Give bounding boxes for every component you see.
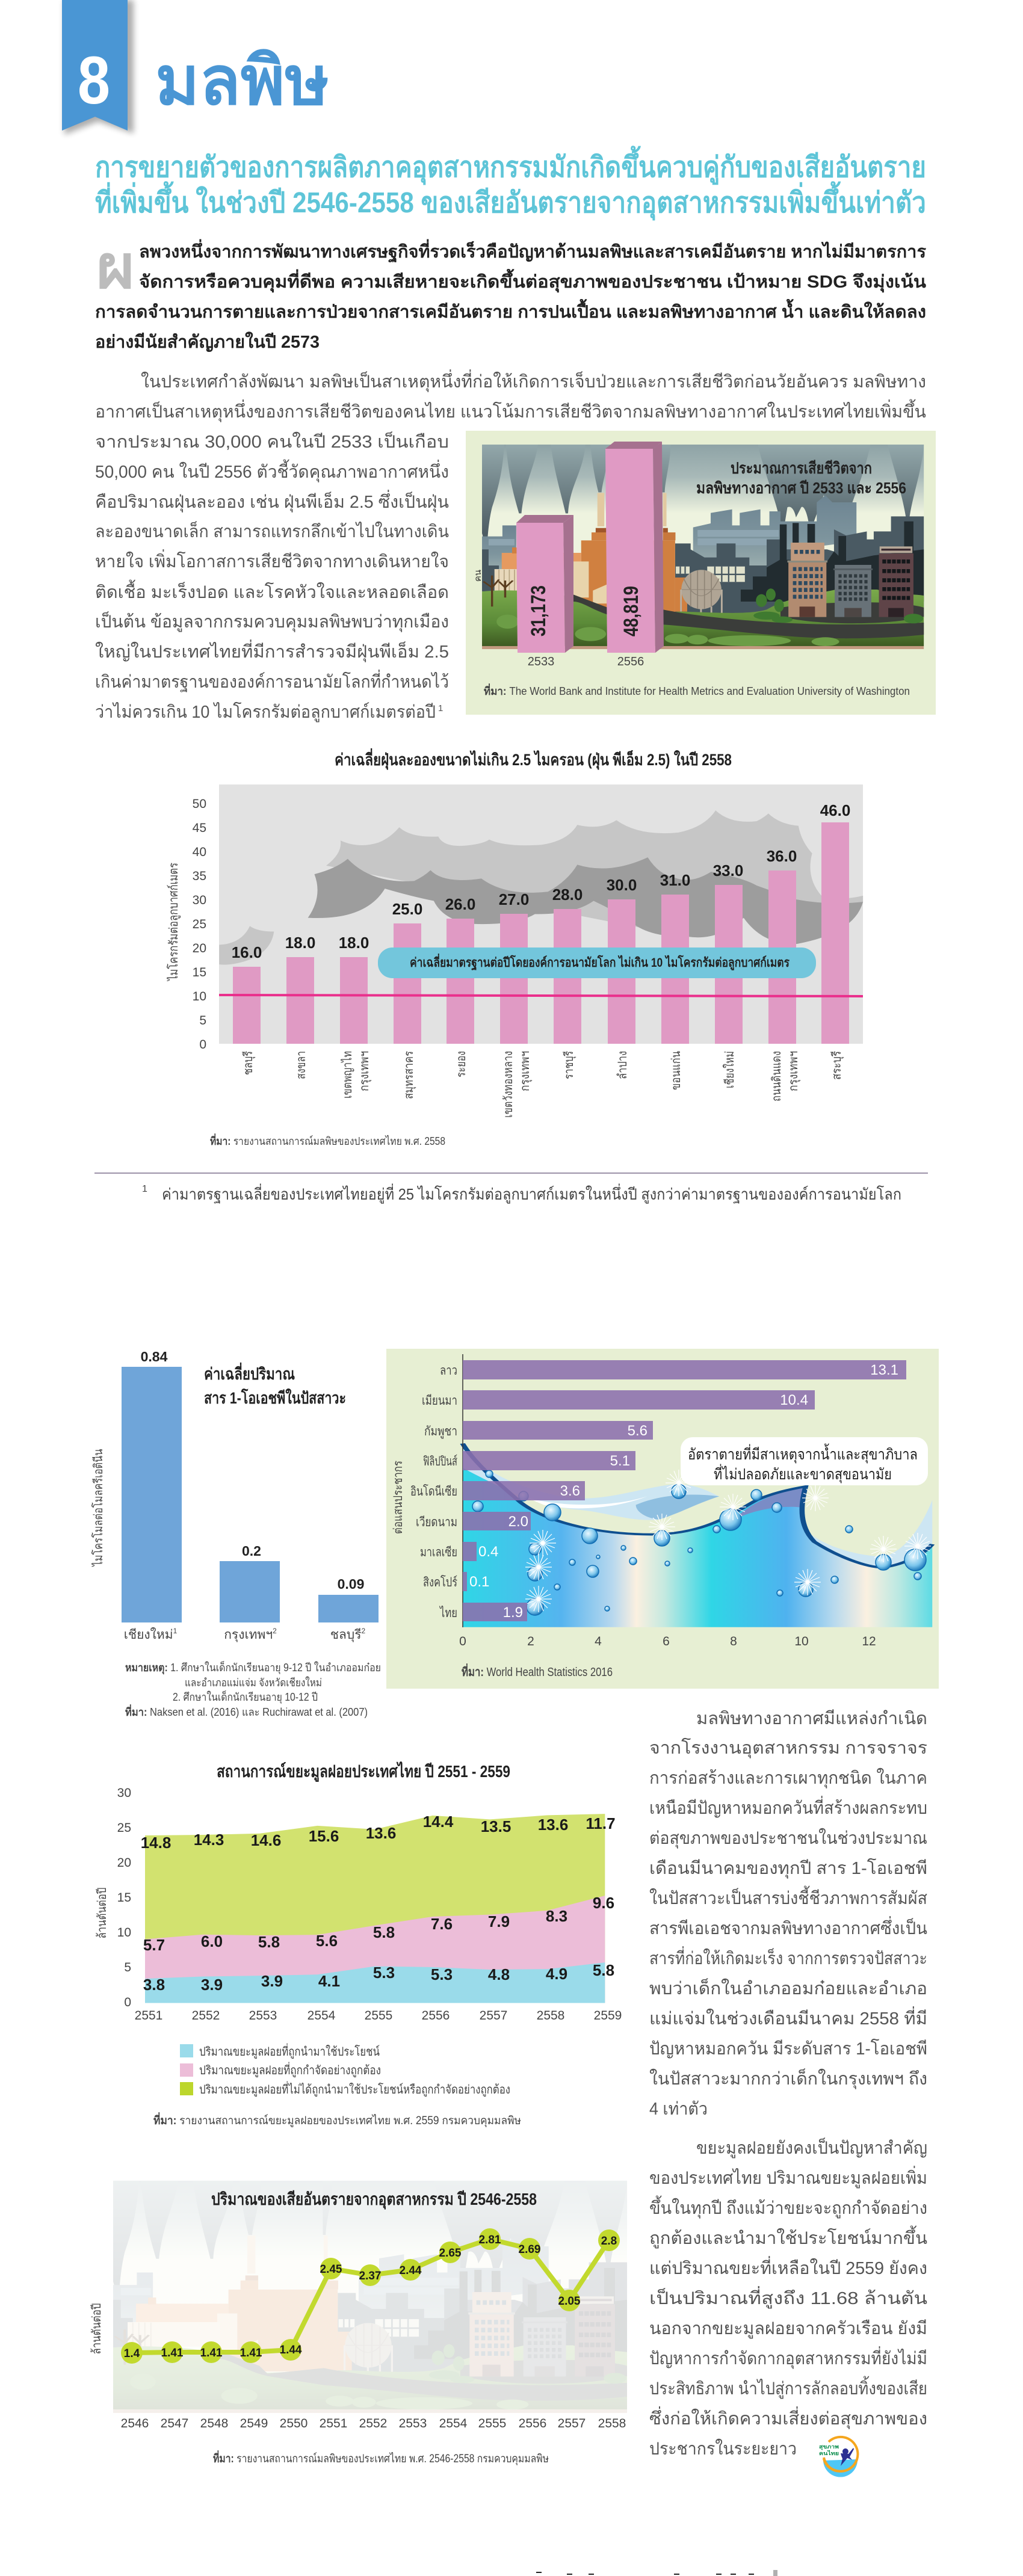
source: ที่มา: รายงานสถานการณ์มลพิษของประเทศไทย พ.ศ. 2546-2558 กรมควบคุมมลพิษ [213, 2450, 549, 2466]
values middle series: 6.0 [201, 1932, 223, 1950]
point values: 1.41 [240, 2347, 262, 2359]
x axis years: 2556 [519, 2417, 546, 2430]
clouds [219, 810, 863, 965]
body text: waste: ซึ่งก่อให้เกิดความเสี่ยงต่อสุขภาพของ [649, 2406, 927, 2429]
illustration: industrial city [482, 445, 924, 649]
y axis values: 5 [124, 1961, 131, 1974]
country labels: อินโดนีเซีย [410, 1484, 457, 1499]
body text: waste: เป็นปริมาณที่สูงถึง 11.68 ล้านตัน [649, 2286, 927, 2309]
country labels: ฟิลิปปินส์ [423, 1454, 457, 1468]
x axis years: 2555 [478, 2417, 506, 2430]
bar values: 36.0 [767, 847, 797, 865]
x axis labels: ชลบุรี [242, 1051, 256, 1075]
body text: air pollution sources: ปัญหาหมอกควัน มีระดับสาร 1-โอเอชพี [649, 2038, 927, 2059]
chapter ribbon with number: 8 [78, 43, 110, 118]
x axis labels [242, 1051, 844, 1118]
body text: air pollution deaths: 50,000 คน ในปี 2556 ตัวชี้วัดคุณภาพอากาศหนึ่ง [95, 459, 449, 482]
body text: air pollution deaths: ว่าไม่ควรเกิน 10 ไมโครกรัมต่อลูกบาศก์เมตรต่อปี [95, 701, 436, 723]
x axis years: 2551 [320, 2417, 347, 2430]
x axis labels: สมุทรสาคร [403, 1051, 416, 1099]
body text: air pollution sources: แม่แจ่มในช่วงเดือนมีนาคม 2558 ที่มี [649, 2006, 927, 2029]
icon: Thai Health logo: สุขภาพ [819, 2444, 839, 2450]
y axis values: 25 [117, 1821, 131, 1835]
values middle series: 9.6 [593, 1894, 614, 1912]
bar 2556: 2556 [617, 655, 644, 668]
bar values: 30.0 [607, 876, 637, 894]
point values: 2.81 [479, 2234, 501, 2246]
country labels: เมียนมา [422, 1394, 457, 1408]
bar values: 46.0 [820, 801, 850, 819]
bar values: 18.0 [339, 934, 369, 952]
country labels: สิงคโปร์ [423, 1575, 457, 1589]
values middle series: 7.6 [431, 1915, 453, 1933]
point values: 1.41 [200, 2347, 223, 2359]
icon: Thai Health logo: คนไทย [819, 2450, 839, 2456]
x axis values [459, 1635, 876, 1648]
values middle series: 5.8 [373, 1923, 395, 1941]
bars [122, 1367, 379, 1622]
y axis title: ไมโครโมลต่อโมลครีเอตินีน [91, 1449, 105, 1567]
x axis labels: ระยอง [455, 1051, 468, 1077]
values bottom series: 5.3 [373, 1964, 395, 1982]
x axis labels: กรุงเทพฯ [519, 1051, 533, 1091]
values top series: 15.6 [309, 1827, 339, 1845]
body text: air pollution sources: 4 เท่าตัว [649, 2100, 708, 2119]
chart title: ค่าเฉลี่ยปริมาณ [204, 1362, 295, 1383]
bars [233, 822, 849, 1044]
notes and source [125, 1660, 381, 1718]
x labels [124, 1627, 366, 1642]
body text: air pollution deaths: คือปริมาณฝุ่นละออง เช่น ฝุ่นพีเอ็ม 2.5 ซึ่งเป็นฝุ่น [95, 490, 449, 513]
x axis values: 4 [595, 1635, 602, 1648]
x axis values: 6 [663, 1635, 670, 1648]
bar values: 26.0 [445, 895, 475, 913]
bar values: 1.9 [503, 1604, 523, 1621]
bar 2533: 2533 [528, 655, 554, 668]
bar values: 5.6 [628, 1423, 647, 1439]
values bottom series: 4.8 [488, 1965, 510, 1983]
body text: waste: นอกจากขยะมูลฝอยจากครัวเรือน ยังมี [649, 2319, 927, 2339]
body text: air pollution sources: เหนือมีปัญหาหมอกควันที่สร้างผลกระทบ [649, 1796, 927, 1818]
country labels: เวียดนาม [416, 1515, 457, 1529]
y axis values: 0 [124, 1995, 131, 2009]
point values: 2.69 [519, 2243, 540, 2256]
bar 2556: 48,819 [620, 586, 643, 636]
chart title [696, 459, 906, 497]
x axis years: 2553 [249, 2009, 277, 2023]
x axis values: 12 [862, 1635, 876, 1648]
point values: 1.41 [161, 2347, 184, 2359]
body text: air pollution deaths [95, 369, 926, 723]
body text: waste: ของประเทศไทย ปริมาณขยะมูลฝอยเพิ่ม [649, 2166, 927, 2189]
point values: 2.45 [320, 2263, 342, 2276]
x labels: 2 [273, 1627, 277, 1635]
subtitle heading: ที่เพิ่มขึ้น ในช่วงปี 2546-2558 ของเสียอันตรายจากอุตสาหกรรมเพิ่มขึ้นเท่าตัว [95, 181, 926, 221]
bar values: 5.1 [610, 1453, 630, 1469]
callout: ที่ไม่ปลอดภัยและขาดสุขอนามัย [714, 1464, 892, 1484]
x labels: 1 [173, 1627, 178, 1635]
subtitle heading: การขยายตัวของการผลิตภาคอุตสาหกรรมมักเกิดขึ้นควบคู่กับของเสียอันตราย [95, 146, 926, 185]
body text: air pollution deaths: ใหญ่ในประเทศไทยที่มีการสำรวจมีฝุ่นพีเอ็ม 2.5 [95, 639, 449, 662]
y axis values: 35 [193, 869, 206, 883]
x axis years: 2546 [121, 2417, 149, 2430]
line chart: hazardous industrial waste [90, 2181, 627, 2466]
values [141, 1349, 364, 1592]
x axis labels: ขอนแก่น [670, 1051, 683, 1090]
intro bold paragraph with drop cap: จัดการหรือควบคุมที่ดีพอ ความเสียหายจะเกิดขึ้นต่อสุขภาพของประชาชน เป้าหมาย SDG จึงมุ่งเน้น [139, 268, 926, 292]
x labels: ชลบุรี [330, 1628, 362, 1642]
values middle series [143, 1894, 614, 1954]
x axis values: 2 [527, 1635, 534, 1648]
values middle series: 7.9 [488, 1912, 510, 1930]
x axis years: 2548 [200, 2417, 228, 2430]
footnote: ค่ามาตรฐานเฉลี่ยของประเทศไทยอยู่ที่ 25 ไมโครกรัมต่อลูกบาศก์เมตรในหนึ่งปี สูงกว่าค่ามาตรฐานขององค์การอนามัยโลก [162, 1183, 901, 1204]
values bottom series: 3.8 [143, 1976, 165, 1994]
y axis values: 20 [193, 941, 206, 955]
callout: อัตราตายที่มีสาเหตุจากน้ำและสุขาภิบาล [688, 1443, 918, 1464]
x axis labels: กรุงเทพฯ [787, 1051, 801, 1091]
x axis labels: ราชบุรี [563, 1051, 576, 1079]
chart title: ปริมาณของเสียอันตรายจากอุตสาหกรรม ปี 2546-2558 [211, 2190, 537, 2210]
chapter ribbon with number [62, 0, 134, 135]
country labels: กัมพูชา [424, 1425, 457, 1439]
y axis values: 25 [193, 917, 206, 931]
area chart: waste situation [96, 1761, 622, 2128]
x axis years: 2557 [480, 2009, 507, 2023]
x axis labels: ลำปาง [616, 1051, 629, 1079]
body text: air pollution sources [649, 1709, 927, 2119]
faded illustration background [113, 2181, 627, 2413]
chart title: สาร 1-โอเอชพีในปัสสาวะ [204, 1388, 346, 1407]
point markers [121, 2228, 620, 2364]
y axis title: ล้านตันต่อปี [90, 2303, 104, 2355]
point values: 1.44 [280, 2344, 302, 2356]
intro bold paragraph with drop cap: ลพวงหนึ่งจากการพัฒนาทางเศรษฐกิจที่รวดเร็วคือปัญหาด้านมลพิษและสารเคมีอันตราย หากไม่มีมาตรการ [139, 239, 926, 263]
water illustration [463, 1444, 932, 1627]
body text: air pollution deaths: ละอองขนาดเล็ก สามารถแทรกลึกเข้าไปในทางเดิน [95, 520, 449, 541]
stacked areas [145, 1814, 605, 2003]
values top series: 13.5 [481, 1817, 511, 1835]
x axis years: 2552 [359, 2417, 387, 2430]
bar 2556 [605, 442, 664, 668]
chart title [204, 1362, 346, 1407]
values middle series: 5.6 [316, 1932, 338, 1950]
bar chart: 1-OHP in urine [91, 1349, 381, 1718]
panel: estimated air pollution deaths [466, 431, 936, 715]
y axis values: 10 [117, 1926, 131, 1940]
chart title: มลพิษทางอากาศ ปี 2533 และ 2556 [696, 479, 906, 497]
bar values [232, 801, 850, 961]
x axis values: 8 [730, 1635, 737, 1648]
x axis labels: เชียงใหม่ [723, 1051, 737, 1088]
panel: sanitation death rates [386, 1349, 939, 1689]
body text: air pollution sources: มลพิษทางอากาศมีแหล่งกำเนิด [696, 1709, 927, 1728]
callout pill [378, 948, 816, 978]
country labels: มาเลเซีย [420, 1545, 457, 1559]
y axis values: 30 [193, 893, 206, 907]
y axis title: ล้านตันต่อปี [96, 1888, 109, 1938]
values bottom series: 5.3 [431, 1965, 453, 1983]
point values: 2.8 [601, 2235, 617, 2248]
bar values: 33.0 [713, 861, 743, 880]
body text: waste: ถูกต้องและนำมาใช้ประโยชน์มากขึ้น [649, 2225, 927, 2249]
body text: air pollution deaths: ในประเทศกำลังพัฒนา มลพิษเป็นสาเหตุหนึ่งที่ก่อให้เกิดการเจ็บป่วยและการเสียชีวิตก่อนวัยอันควร มลพิษทาง [141, 369, 926, 392]
body text: air pollution deaths: เป็นต้น ข้อมูลจากกรมควบคุมมลพิษพบว่าทุกเมือง [95, 611, 449, 632]
bar values: 2.0 [508, 1514, 528, 1530]
x axis years [121, 2417, 626, 2430]
legend: ปริมาณขยะมูลฝอยที่ไม่ได้ถูกนำมาใช้ประโยชน์หรือถูกกำจัดอย่างถูกต้อง [199, 2081, 510, 2097]
values middle series: 5.8 [258, 1933, 280, 1951]
y axis values: 45 [193, 821, 206, 835]
source: ที่มา: รายงานสถานการณ์ขยะมูลฝอยของประเทศไทย พ.ศ. 2559 กรมควบคุมมลพิษ [153, 2112, 521, 2128]
bar values: 10.4 [780, 1392, 808, 1408]
point values: 2.65 [439, 2247, 462, 2260]
body text: waste: ประชากรในระยะยาว [649, 2438, 797, 2459]
values bottom series [143, 1961, 614, 1994]
y axis values: 15 [117, 1891, 131, 1905]
x axis years: 2550 [280, 2417, 308, 2430]
values top series: 14.3 [194, 1831, 224, 1849]
x axis years: 2556 [422, 2009, 450, 2023]
y axis values: 40 [193, 845, 206, 859]
bar 2533: 31,173 [527, 585, 550, 636]
country labels: ลาว [440, 1364, 457, 1378]
body text: waste: ประสิทธิภาพ นำไปสู่การลักลอบทิ้งของเสีย [649, 2376, 927, 2399]
horizontal bars [463, 1360, 906, 1621]
y axis title: ไมโครกรัมต่อลูกบาศก์เมตร [167, 863, 181, 982]
values top series: 14.8 [141, 1834, 171, 1852]
body text: air pollution deaths: เกินค่ามาตรฐานขององค์การอนามัยโลกที่กำหนดไว้ [95, 670, 449, 692]
values bottom series: 5.8 [593, 1961, 614, 1979]
body text: air pollution sources: ต่อสุขภาพของประชาชนในช่วงประมาณ [649, 1828, 927, 1849]
notes and source: หมายเหตุ: 1. ศึกษาในเด็กนักเรียนอายุ 9-12 ปี ในอำเภออมก๋อย [125, 1660, 381, 1675]
y axis values: 10 [193, 990, 206, 1003]
body text: air pollution deaths: จากประมาณ 30,000 คนในปี 2533 เป็นเกือบ [95, 431, 449, 452]
x axis labels: ถนนดินแดง [770, 1051, 783, 1102]
x axis years: 2554 [308, 2009, 336, 2023]
x axis values: 0 [459, 1635, 466, 1648]
bar values: 18.0 [285, 934, 315, 952]
intro bold paragraph with drop cap: ผ [96, 233, 135, 301]
intro bold paragraph with drop cap: อย่างมีนัยสำคัญภายในปี 2573 [95, 331, 320, 353]
y axis values: 0 [199, 1038, 206, 1052]
body text: air pollution deaths: หายใจ เพิ่มโอกาสการเสียชีวิตจากทางเดินหายใจ [95, 549, 449, 572]
body text: air pollution deaths: 1 [438, 703, 443, 713]
chart title: ประมาณการเสียชีวิตจาก [731, 459, 872, 477]
body text: air pollution deaths: ติดเชื้อ มะเร็งปอด และโรคหัวใจและหลอดเลือด [95, 579, 449, 602]
values middle series: 8.3 [546, 1907, 567, 1925]
values middle series: 5.7 [143, 1936, 165, 1954]
y axis values: 15 [193, 966, 206, 979]
bar values [469, 1362, 898, 1621]
y axis values: 5 [199, 1014, 206, 1028]
bar values: 27.0 [499, 890, 529, 908]
values top series: 14.6 [251, 1831, 281, 1849]
subtitle heading [95, 146, 926, 221]
x axis labels: สระบุรี [830, 1051, 844, 1080]
bubbles [472, 1470, 926, 1615]
intro bold paragraph with drop cap [95, 233, 926, 353]
source: ที่มา: รายงานสถานการณ์มลพิษของประเทศไทย พ.ศ. 2558 [210, 1133, 445, 1147]
x labels: เชียงใหม่ [124, 1628, 173, 1642]
values top series [141, 1813, 616, 1852]
bar values: 25.0 [392, 900, 422, 918]
source: ที่มา: The World Bank and Institute for Health Metrics and Evaluation University of Washington [484, 683, 910, 697]
values: 0.09 [338, 1576, 364, 1592]
point values [124, 2234, 617, 2360]
values bottom series: 3.9 [261, 1972, 283, 1990]
point values: 2.37 [359, 2270, 381, 2282]
values bottom series: 4.1 [318, 1972, 340, 1990]
bar values: 3.6 [560, 1483, 580, 1499]
bar chart: PM2.5 by station [167, 784, 863, 1118]
body text: air pollution sources: เดือนมีนาคมของทุกปี สาร 1-โอเอชพี [649, 1858, 927, 1879]
bar values: 0.4 [478, 1544, 498, 1560]
x labels: กรุงเทพฯ [224, 1628, 273, 1642]
icon: Thai Health logo [819, 2437, 858, 2477]
x axis labels: เขตวังทองหลาง [502, 1051, 515, 1118]
body text: air pollution sources: สารพีเอเอชจากมลพิษทางอากาศซึ่งเป็น [649, 1916, 927, 1938]
values top series: 14.4 [423, 1813, 454, 1831]
y axis title: ต่อแสนประชากร [392, 1461, 405, 1534]
x axis years: 2547 [161, 2417, 188, 2430]
chart title: PM2.5: ค่าเฉลี่ยฝุ่นละอองขนาดไม่เกิน 2.5 ไมครอน (ฝุ่น พีเอ็ม 2.5) ในปี 2558 [335, 748, 732, 770]
values bottom series: 3.9 [201, 1976, 223, 1994]
values bottom series: 4.9 [546, 1965, 567, 1983]
body text: air pollution sources: การก่อสร้างและการเผาทุกชนิด ในภาค [649, 1767, 927, 1789]
intro bold paragraph with drop cap: การลดจำนวนการตายและการป่วยจากสารเคมีอันตราย การปนเปื้อน และมลพิษทางอากาศ น้ำ และดินให้ลดลง [95, 298, 926, 322]
x axis years: 2552 [192, 2009, 220, 2023]
bar values: 31.0 [660, 871, 690, 889]
values: 0.2 [242, 1543, 261, 1559]
x axis values: 10 [794, 1635, 809, 1648]
x axis years: 2559 [594, 2009, 622, 2023]
bar values: 13.1 [870, 1362, 898, 1378]
body text: waste [649, 2137, 927, 2459]
x axis years: 2553 [399, 2417, 427, 2430]
chapter title: มลพิษ [155, 43, 329, 119]
x axis years: 2549 [240, 2417, 268, 2430]
body text: air pollution sources: ในปัสสาวะเป็นสารบ่งชี้ชีวภาพการสัมผัส [649, 1885, 927, 1908]
body text: waste: ขึ้นในทุกปี ถึงแม้ว่าขยะจะถูกกำจัดอย่าง [649, 2195, 927, 2219]
axis label: persons: คน [473, 570, 483, 582]
x axis years: 2554 [439, 2417, 468, 2430]
body text: waste: ขยะมูลฝอยยังคงเป็นปัญหาสำคัญ [696, 2137, 927, 2158]
chart title: สถานการณ์ขยะมูลฝอยประเทศไทย ปี 2551 - 2559 [217, 1761, 510, 1782]
callout [681, 1437, 928, 1485]
line [132, 2239, 609, 2353]
x axis years: 2558 [598, 2417, 626, 2430]
bar values: 0.1 [469, 1574, 489, 1590]
legend [180, 2043, 510, 2097]
bar 2533 [516, 515, 573, 668]
point values: 1.4 [124, 2347, 140, 2360]
x axis labels: สงขลา [295, 1051, 308, 1079]
body text: air pollution sources: สารที่ก่อให้เกิดมะเร็ง จากการตรวจปัสสาวะ [649, 1946, 927, 1968]
y axis values [193, 797, 206, 1052]
x labels: 2 [362, 1627, 366, 1635]
footnote: 1 [142, 1184, 147, 1194]
bar values: 28.0 [552, 886, 583, 904]
point values: 2.44 [400, 2264, 422, 2277]
y axis values: 50 [193, 797, 206, 811]
point values: 2.05 [558, 2295, 581, 2308]
country labels [410, 1364, 457, 1620]
y axis values [117, 1786, 131, 2009]
values top series: 13.6 [538, 1816, 568, 1834]
bar values: 16.0 [232, 943, 262, 961]
notes and source: และอำเภอแม่แจ่ม จังหวัดเชียงใหม่ [185, 1676, 322, 1689]
x axis years [135, 2009, 622, 2023]
x axis years: 2558 [537, 2009, 564, 2023]
body text: air pollution sources: ในปัสสาวะมากกว่าเด็กในกรุงเทพฯ ถึง [649, 2068, 927, 2089]
legend: ปริมาณขยะมูลฝอยที่ถูกนำมาใช้ประโยชน์ [199, 2043, 380, 2059]
source: ที่มา: World Health Statistics 2016 [462, 1663, 613, 1679]
body text: air pollution sources: จากโรงงานอุตสาหกรรม การจราจร [649, 1737, 927, 1758]
values top series: 13.6 [366, 1824, 396, 1842]
body text: waste: ปัญหาการกำจัดกากอุตสาหกรรมที่ยังไม่มี [649, 2346, 927, 2369]
WHO limit line [219, 995, 863, 996]
x axis labels: เขตพญาไท [341, 1051, 354, 1098]
notes and source: 2. ศึกษาในเด็กนักเรียนอายุ 10-12 ปี [173, 1690, 318, 1704]
body text: air pollution deaths: อากาศเป็นสาเหตุหนึ่งของการเสียชีวิตของคนไทย แนวโน้มการเสียชีวิตจากมลพิษทางอากาศในประเทศไทยเพิ่มขึ้น [95, 399, 926, 422]
x axis years: 2557 [558, 2417, 586, 2430]
y axis values: 30 [117, 1786, 131, 1800]
y axis values: 20 [117, 1856, 131, 1870]
x axis years: 2555 [365, 2009, 392, 2023]
body text: air pollution sources: พบว่าเด็กในอำเภออมก๋อยและอำเภอ [649, 1977, 927, 1998]
values top series: 11.7 [586, 1814, 616, 1832]
callout pill: ค่าเฉลี่ยมาตรฐานต่อปีโดยองค์การอนามัยโลก ไม่เกิน 10 ไมโครกรัมต่อลูกบาศก์เมตร [410, 953, 790, 971]
x axis labels: กรุงเทพฯ [358, 1051, 372, 1091]
values: 0.84 [141, 1349, 168, 1364]
x axis years: 2551 [135, 2009, 162, 2023]
country labels: ไทย [439, 1606, 457, 1620]
body text: waste: แต่ปริมาณขยะที่เหลือในปี 2559 ยังคง [649, 2256, 927, 2278]
legend: ปริมาณขยะมูลฝอยที่ถูกกำจัดอย่างถูกต้อง [199, 2062, 381, 2078]
notes and source: ที่มา: Naksen et al. (2016) และ Ruchirawat et al. (2007) [125, 1704, 368, 1718]
